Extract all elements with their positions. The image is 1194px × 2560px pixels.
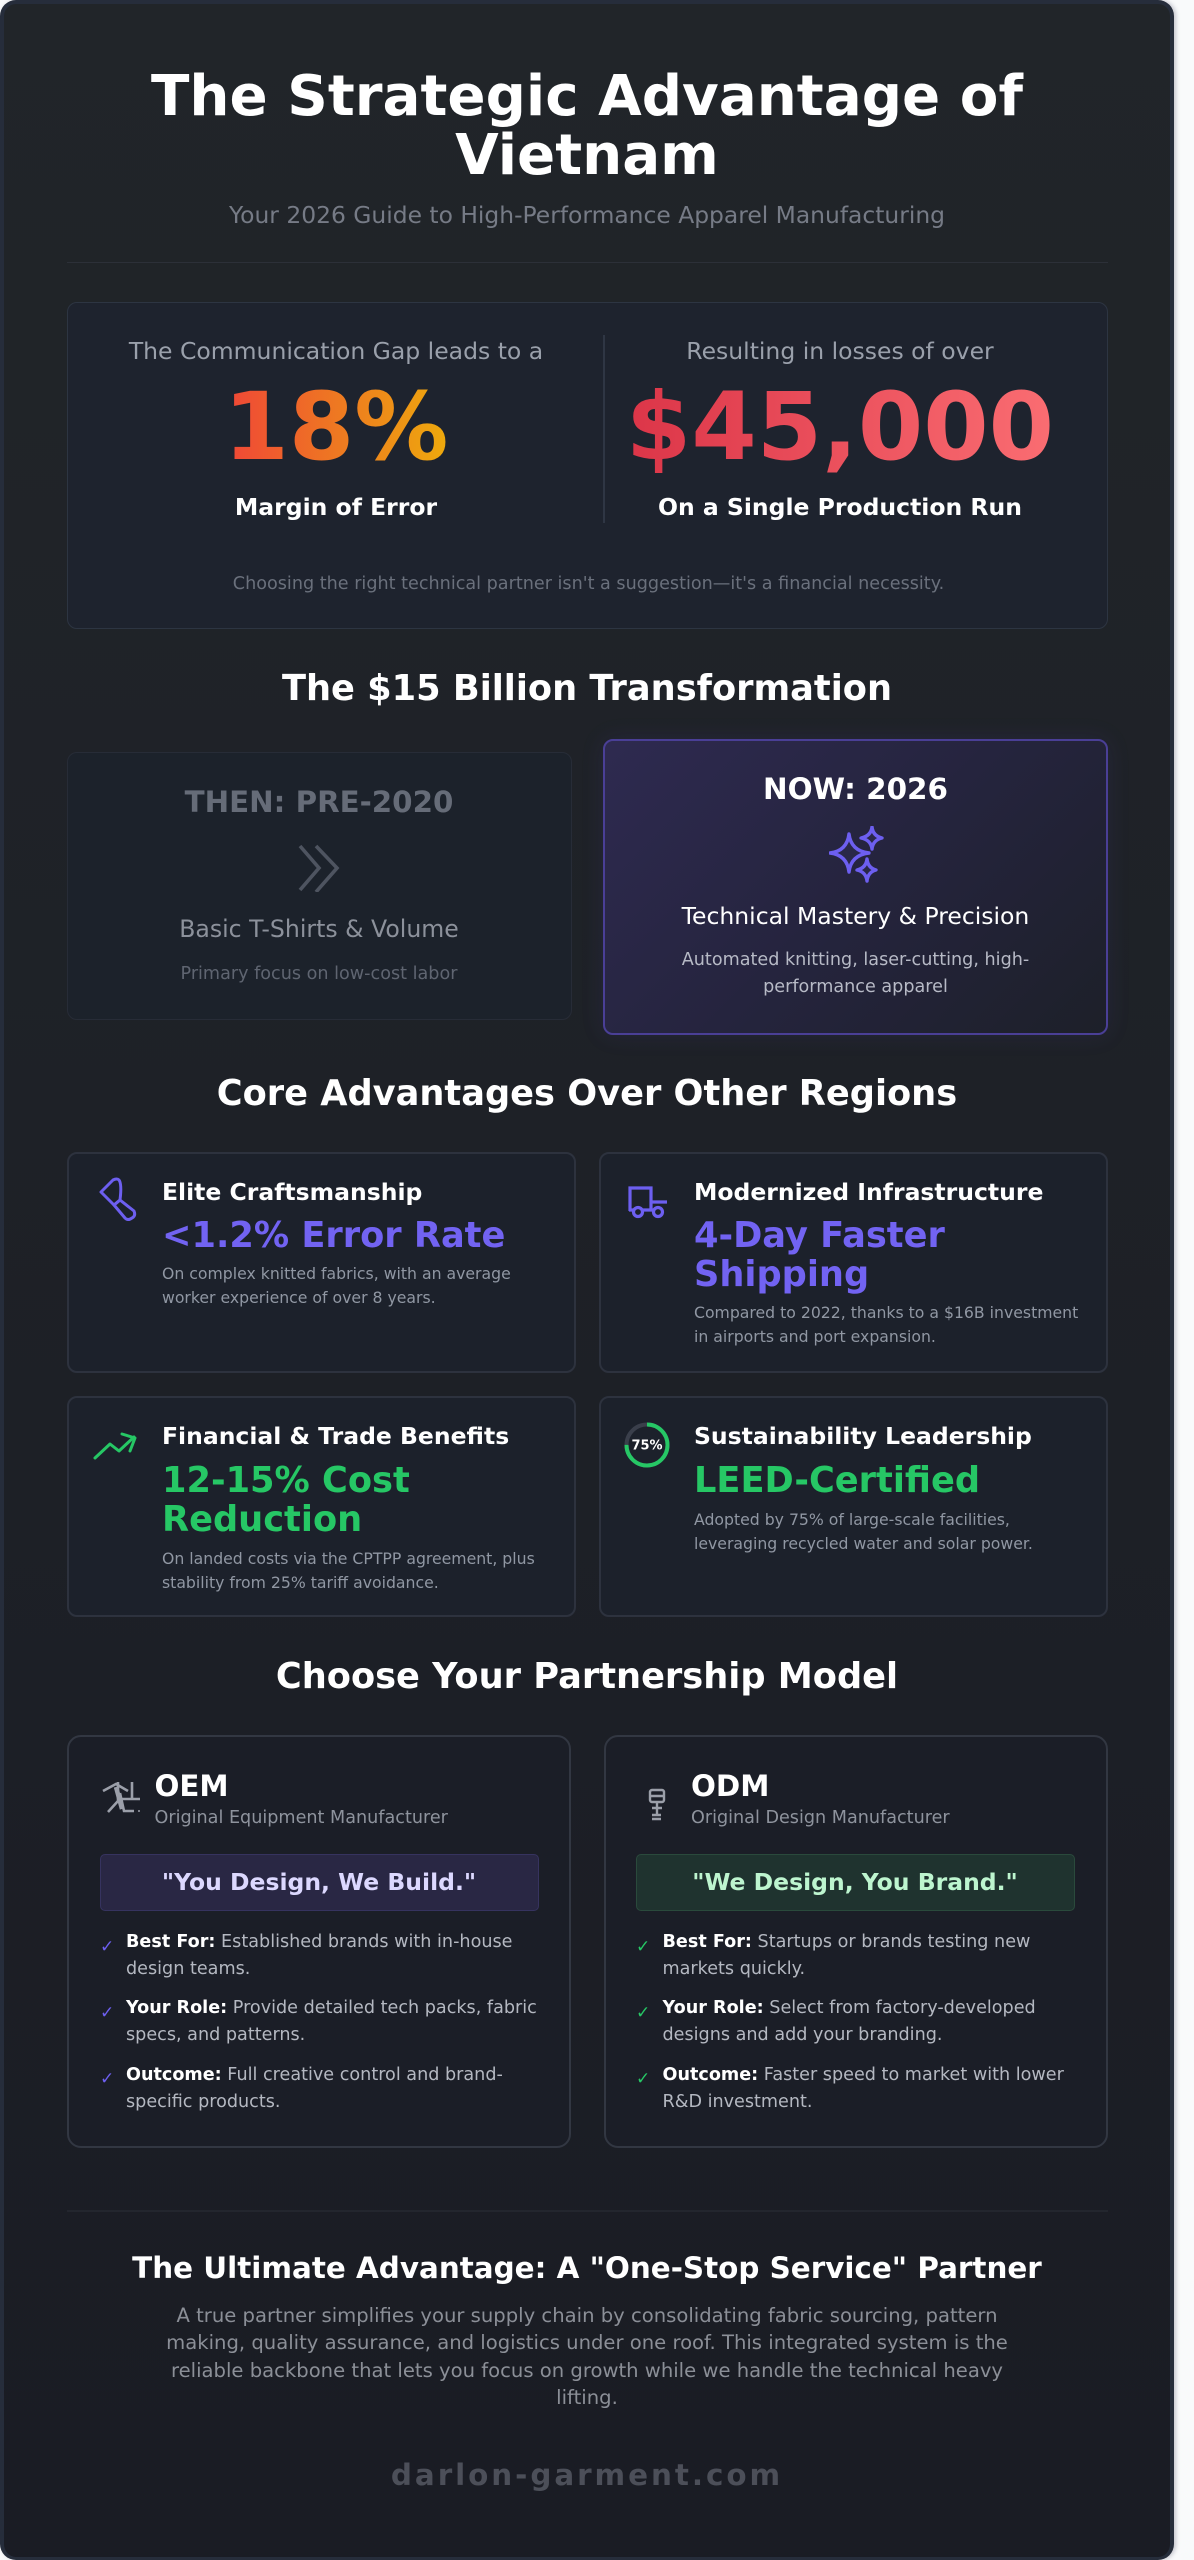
your role: designs and add your branding.	[662, 2025, 942, 2045]
stat: 18 percent: 18%	[224, 373, 448, 482]
card text: worker experience of over 8 years.	[162, 1288, 436, 1307]
icon: double chevron	[298, 844, 340, 892]
check: ✓	[100, 2069, 114, 2089]
subtitle: Your 2026 Guide to High-Performance Apparel Manufacturing	[229, 201, 945, 229]
OEM subtitle: Original Equipment Manufacturer	[154, 1808, 448, 1828]
your role	[126, 1998, 537, 2045]
card stat: Shipping	[694, 1254, 869, 1295]
stat: 45,000 dollars: $45,000	[626, 373, 1054, 482]
then description: Basic T-Shirts & Volume	[179, 915, 459, 943]
card: elite craftsmanship	[67, 1152, 576, 1373]
best for: Best For: Startups or brands testing new	[662, 1932, 1030, 1952]
icon: sparkles	[829, 826, 884, 883]
check: ✓	[100, 2003, 114, 2023]
card text	[162, 1548, 535, 1592]
panel: then	[67, 752, 572, 1020]
card text: Compared to 2022, thanks to a $16B investment	[694, 1303, 1078, 1322]
ODM quote: "We Design, You Brand."	[692, 1868, 1018, 1896]
ODM quote	[636, 1854, 1074, 1910]
card stat	[694, 1215, 945, 1295]
ODM benefits list	[636, 1932, 1064, 2112]
OEM title: OEM	[154, 1769, 229, 1803]
your role	[662, 1998, 1036, 2045]
paragraph: lifting.	[556, 2386, 618, 2409]
then note: Primary focus on low-cost labor	[181, 964, 457, 984]
now description: Technical Mastery & Precision	[682, 902, 1029, 930]
now note: performance apparel	[763, 977, 948, 997]
check: ✓	[636, 2003, 650, 2023]
best for: markets quickly.	[662, 1959, 805, 1979]
card: sustainability leadership	[599, 1396, 1108, 1617]
best for: design teams.	[126, 1959, 250, 1979]
outcome: specific products.	[126, 2092, 280, 2112]
heading: transformation: The $15 Billion Transformation	[282, 668, 892, 708]
card title: Elite Craftsmanship	[162, 1178, 422, 1206]
then heading: THEN: PRE-2020	[185, 785, 453, 819]
card text	[162, 1264, 511, 1307]
card title: Modernized Infrastructure	[694, 1178, 1043, 1206]
best for	[662, 1932, 1030, 1979]
caption: single production run: On a Single Production Run	[658, 493, 1022, 521]
best for: Best For: Established brands with in-house	[126, 1932, 512, 1952]
ODM title: ODM	[691, 1769, 769, 1803]
panel: communication gap stats	[67, 302, 1108, 629]
card text: stability from 25% tariff avoidance.	[162, 1572, 439, 1592]
title	[151, 64, 1024, 188]
now heading: NOW: 2026	[763, 772, 948, 806]
heading: partnership model: Choose Your Partnership Model	[276, 1656, 898, 1696]
paragraph: making, quality assurance, and logistics under one roof. This integrated system is the	[166, 2331, 1008, 2354]
icon: truck	[628, 1186, 667, 1218]
outcome	[126, 2064, 503, 2112]
card text	[694, 1303, 1078, 1346]
ODM subtitle: Original Design Manufacturer	[691, 1808, 950, 1828]
footer website: darlon-garment.com	[391, 2458, 783, 2492]
left label: The Communication Gap leads to a	[129, 336, 543, 364]
icon: ODM	[648, 1788, 666, 1820]
card text: in airports and port expansion.	[694, 1327, 936, 1346]
heading: ultimate advantage: The Ultimate Advantage: A "One-Stop Service" Partner	[132, 2251, 1042, 2285]
heading: core advantages: Core Advantages Over Other Regions	[217, 1073, 957, 1114]
now note	[682, 950, 1029, 997]
card stat: 4-Day Faster	[694, 1215, 945, 1256]
card title: Financial & Trade Benefits	[162, 1422, 509, 1450]
right label: Resulting in losses of over	[686, 336, 994, 364]
card stat: 12-15% Cost	[162, 1460, 410, 1501]
card: modernized infrastructure	[599, 1152, 1108, 1373]
your role: specs, and patterns.	[126, 2025, 305, 2045]
best for	[126, 1932, 512, 1979]
card text: leveraging recycled water and solar power.	[694, 1534, 1033, 1552]
card stat: LEED-Certified	[694, 1460, 980, 1501]
card text: On complex knitted fabrics, with an average	[162, 1264, 511, 1283]
card text: Adopted by 75% of large-scale facilities,	[694, 1510, 1010, 1528]
caption: margin of error: Margin of Error	[235, 493, 437, 521]
panel: ODM	[604, 1735, 1108, 2148]
paragraph: A true partner simplifies your supply chain by consolidating fabric sourcing, pattern	[176, 2304, 998, 2327]
icon: trend arrow	[93, 1432, 136, 1460]
paragraph	[166, 2304, 1008, 2409]
icon: craft tool	[99, 1178, 136, 1221]
icon: OEM	[102, 1782, 140, 1813]
outcome: Outcome: Faster speed to market with lower	[662, 2064, 1064, 2084]
note: Choosing the right technical partner isn't a suggestion—it's a financial necessity.	[233, 574, 944, 594]
OEM quote: "You Design, We Build."	[162, 1868, 476, 1896]
card stat: <1.2% Error Rate	[162, 1215, 505, 1256]
card text: On landed costs via the CPTPP agreement, plus	[162, 1548, 535, 1568]
your role: Your Role: Select from factory-developed	[662, 1998, 1036, 2018]
card title: Sustainability Leadership	[694, 1422, 1032, 1450]
icon: 75 percent ring	[624, 1422, 670, 1468]
card text	[694, 1510, 1033, 1552]
OEM quote	[100, 1854, 538, 1910]
icon: 75 percent ring: 75%	[631, 1438, 663, 1454]
check: ✓	[100, 1937, 114, 1957]
outcome: Outcome: Full creative control and brand-	[126, 2064, 503, 2084]
check: ✓	[636, 1937, 650, 1957]
card stat	[162, 1460, 410, 1540]
OEM benefits list	[100, 1932, 537, 2112]
paragraph: reliable backbone that lets you focus on growth while we handle the technical heavy	[171, 2359, 1003, 2382]
your role: Your Role: Provide detailed tech packs, fabric	[126, 1998, 537, 2018]
card stat: Reduction	[162, 1499, 362, 1540]
panel: OEM	[67, 1735, 571, 2148]
outcome	[662, 2064, 1064, 2112]
outcome: R&D investment.	[662, 2092, 813, 2112]
title: Vietnam	[455, 122, 719, 188]
check: ✓	[636, 2069, 650, 2089]
now note: Automated knitting, laser-cutting, high-	[682, 950, 1029, 970]
title: The Strategic Advantage of	[151, 64, 1023, 129]
card: financial and trade benefits	[67, 1396, 576, 1617]
panel: now	[603, 739, 1108, 1035]
